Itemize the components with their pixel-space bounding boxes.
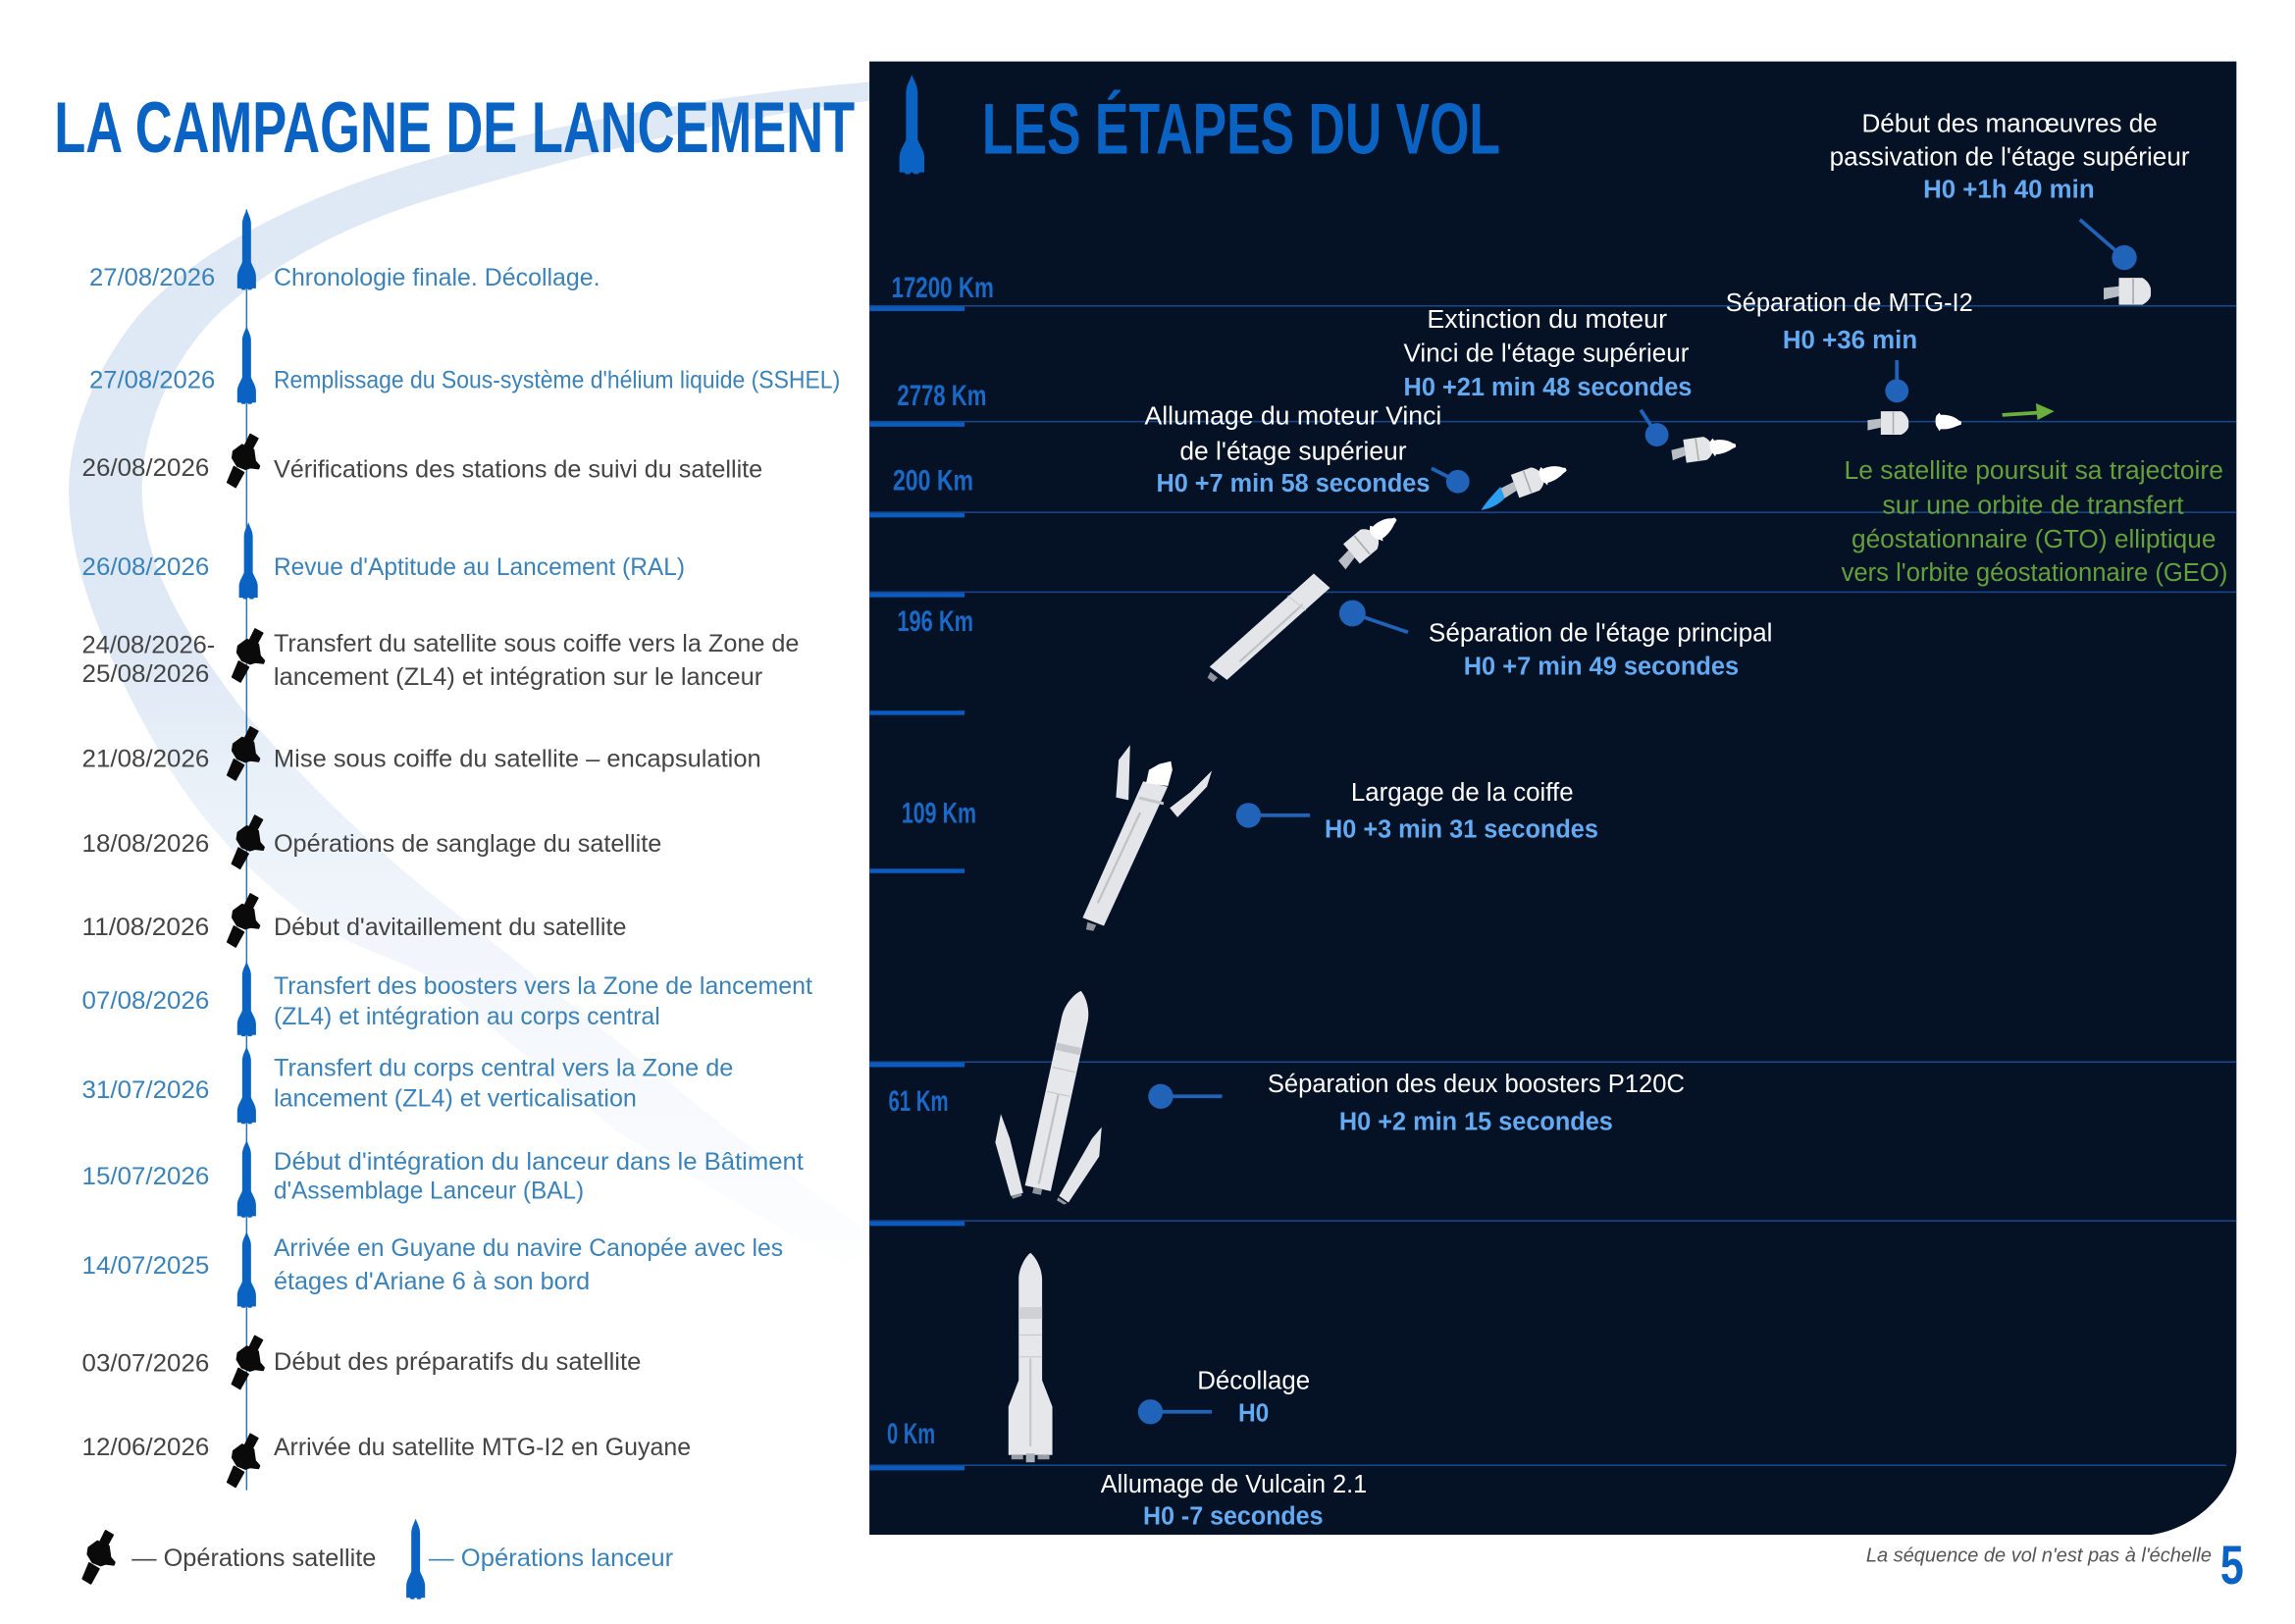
text: Début des manœuvres de — [1861, 108, 2158, 137]
line 2: sur une orbite de transfert — [1882, 491, 2184, 520]
altitude label: 200 km: 200 Km — [893, 465, 973, 498]
main stage — [1208, 573, 1330, 682]
text line 2: passivation de l'étage supérieur — [1830, 142, 2190, 172]
time: H0 +2 min 15 secondes — [1339, 1107, 1613, 1136]
step: allumage de Vulcain 2.1 — [1101, 1469, 1367, 1531]
description line 2: étages d'Ariane 6 à son bord — [274, 1268, 590, 1295]
legend label: lanceur: — Opérations lanceur — [429, 1545, 674, 1572]
text: Allumage de Vulcain 2.1 — [1101, 1469, 1367, 1498]
time: H0 +1h 40 min — [1923, 174, 2095, 203]
panel background — [869, 62, 2236, 1535]
icon: rocket — [237, 327, 256, 404]
note: échelle: La séquence de vol n'est pas à l'échelle — [1866, 1545, 2212, 1567]
step: séparation de MTG-I2 — [1726, 288, 2055, 435]
text: Largage de la coiffe — [1351, 777, 1574, 807]
time: H0 -7 secondes — [1143, 1501, 1324, 1531]
text: Décollage — [1197, 1366, 1310, 1395]
row: 14/07/2025 arrivée du navire — [82, 1231, 783, 1308]
icon: satellite — [228, 1434, 259, 1487]
row: 26/08/2026 revue d'aptitude — [82, 523, 685, 599]
step: début des manœuvres de passivation — [1830, 108, 2190, 305]
rocket on pad — [1009, 1253, 1053, 1462]
description: Revue d'Aptitude au Lancement (RAL) — [274, 553, 685, 581]
icon: satellite — [233, 629, 264, 682]
date: 21/08/2026 — [82, 746, 209, 773]
rocket core — [1023, 988, 1094, 1197]
description: Opérations de sanglage du satellite — [274, 830, 661, 858]
time: H0 — [1238, 1397, 1269, 1427]
text line 2: de l'étage supérieur — [1179, 436, 1407, 465]
row: 27/08/2026 remplissage — [89, 327, 840, 404]
description line 1: Transfert du satellite sous coiffe vers la Zone de — [274, 630, 799, 657]
upper stage with payload — [1670, 433, 1737, 465]
altitude label: 17200 km: 17200 Km — [891, 272, 994, 304]
satellite MTG-I2 — [1936, 413, 1961, 431]
description line 1: Transfert des boosters vers la Zone de lancement — [274, 972, 812, 1000]
date: 11/08/2026 — [82, 914, 209, 941]
description line 2: d'Assemblage Lanceur (BAL) — [274, 1178, 584, 1205]
row: 24-25/08/2026 transfert du satellite — [82, 629, 799, 691]
step: extinction du moteur Vinci — [1404, 304, 1737, 465]
time: H0 +7 min 58 secondes — [1156, 468, 1430, 498]
description: Vérifications des stations de suivi du satellite — [274, 455, 762, 483]
upper stage — [1867, 411, 1908, 435]
description: Chronologie finale. Décollage. — [274, 264, 600, 291]
date: 03/07/2026 — [82, 1350, 209, 1378]
date: 27/08/2026 — [89, 264, 215, 291]
date: 31/07/2026 — [82, 1076, 209, 1104]
altitude label: 2778 km: 2778 Km — [897, 380, 986, 412]
step: séparation des boosters — [995, 988, 1685, 1205]
description: Arrivée du satellite MTG-I2 en Guyane — [274, 1434, 691, 1461]
pin — [1138, 1399, 1212, 1424]
description line 1: Arrivée en Guyane du navire Canopée avec les — [274, 1234, 783, 1262]
row: 31/07/2026 transfert du corps central — [82, 1047, 733, 1124]
upper stage — [2104, 278, 2151, 305]
title: la campagne de lancement: LA CAMPAGNE DE LANCEMENT — [54, 88, 855, 168]
icon: rocket — [237, 1047, 256, 1124]
row: 27/08/2026 chronologie finale — [89, 209, 600, 291]
callout: orbite de transfert — [1842, 455, 2227, 587]
pin — [1885, 360, 1908, 402]
row: 18/08/2026 sanglage — [82, 815, 661, 868]
step: séparation de l'étage principal — [1208, 507, 1772, 682]
legend — [82, 1519, 674, 1599]
booster left — [995, 1114, 1023, 1199]
line 1: Le satellite poursuit sa trajectoire — [1845, 455, 2223, 485]
date: 26/08/2026 — [82, 553, 209, 581]
time: H0 +3 min 31 secondes — [1325, 813, 1598, 843]
date: 07/08/2026 — [82, 987, 209, 1015]
date: 18/08/2026 — [82, 830, 209, 858]
legend icon: satellite — [82, 1531, 115, 1584]
line 3: géostationnaire (GTO) elliptique — [1852, 524, 2216, 553]
description line 2: lancement (ZL4) et intégration sur le lanceur — [274, 663, 763, 691]
date end: 25/08/2026 — [82, 660, 209, 688]
rocket core with payload — [1082, 761, 1173, 931]
line 4: vers l'orbite géostationnaire (GEO) — [1842, 557, 2227, 587]
page number: 5 — [2220, 1535, 2244, 1596]
text line 2: Vinci de l'étage supérieur — [1404, 338, 1690, 367]
row: 12/06/2026 arrivée du satellite — [82, 1434, 691, 1487]
time: H0 +36 min — [1783, 325, 1917, 354]
text: Allumage du moteur Vinci — [1145, 401, 1441, 431]
upper stage with flame — [1474, 456, 1570, 511]
panel: les étapes du vol — [869, 62, 2236, 1535]
description: Début des préparatifs du satellite — [274, 1348, 641, 1376]
description line 1: Transfert du corps central vers la Zone de — [274, 1054, 733, 1081]
row: 11/08/2026 avitaillement — [82, 894, 626, 947]
icon: satellite — [228, 727, 259, 780]
description line 2: (ZL4) et intégration au corps central — [274, 1003, 660, 1030]
description: Mise sous coiffe du satellite – encapsulation — [274, 746, 761, 773]
icon: satellite — [232, 1336, 264, 1388]
pin — [1236, 803, 1310, 828]
fairing half right — [1170, 770, 1212, 817]
pin — [1641, 410, 1669, 446]
pin — [2080, 220, 2137, 270]
legend label: satellite: — Opérations satellite — [131, 1545, 376, 1572]
background swoosh arc — [69, 82, 878, 1266]
icon: rocket — [239, 523, 258, 599]
icon: satellite — [228, 435, 259, 488]
altitude label: 61 km: 61 Km — [888, 1085, 949, 1118]
fairing half left — [1116, 745, 1130, 800]
text: Séparation de l'étage principal — [1429, 617, 1772, 647]
icon: satellite — [232, 815, 264, 868]
altitude label: 196 km: 196 Km — [897, 605, 973, 638]
altitude lines — [869, 306, 2236, 1465]
date: 27/08/2026 — [89, 366, 215, 393]
date: 24/08/2026- — [82, 631, 215, 658]
row: 03/07/2026 préparatifs — [82, 1336, 641, 1388]
icon: rocket — [237, 1231, 256, 1308]
text: Séparation des deux boosters P120C — [1268, 1069, 1685, 1098]
timeline axis — [245, 209, 247, 1491]
row: 07/08/2026 transfert des boosters — [82, 962, 812, 1036]
icon: rocket — [237, 962, 256, 1036]
row: 21/08/2026 mise sous coiffe — [82, 727, 761, 780]
altitude label: 109 km: 109 Km — [902, 797, 976, 829]
altitude label: 0 km: 0 Km — [887, 1418, 935, 1450]
time: H0 +7 min 49 secondes — [1464, 652, 1739, 681]
pin — [1432, 468, 1470, 494]
description: Début d'avitaillement du satellite — [274, 914, 626, 941]
step: décollage — [1009, 1253, 1310, 1462]
icon: satellite — [228, 894, 259, 947]
arrow: orbit direction — [2003, 403, 2055, 420]
upper stage with payload — [1332, 507, 1403, 573]
pin — [1339, 601, 1408, 632]
icon: rocket — [237, 1140, 256, 1218]
row: 15/07/2026 début d'intégration — [82, 1140, 804, 1218]
step: allumage du moteur Vinci — [1145, 401, 1570, 511]
row: 26/08/2026 vérifications — [82, 435, 762, 488]
title: les étapes du vol: LES ÉTAPES DU VOL — [982, 90, 1500, 170]
legend icon: rocket — [406, 1519, 425, 1599]
icon: title rocket — [900, 75, 924, 174]
date: 14/07/2025 — [82, 1252, 209, 1280]
description line 1: Début d'intégration du lanceur dans le Bâtiment — [274, 1148, 804, 1176]
description: Remplissage du Sous-système d'hélium liquide (SSHEL) — [274, 366, 840, 393]
step: largage de la coiffe — [1082, 745, 1598, 931]
text: Extinction du moteur — [1427, 304, 1667, 334]
icon: rocket — [237, 209, 256, 289]
date: 12/06/2026 — [82, 1434, 209, 1461]
date: 26/08/2026 — [82, 454, 209, 482]
description line 2: lancement (ZL4) et verticalisation — [274, 1085, 637, 1113]
pin — [1148, 1084, 1223, 1109]
date: 15/07/2026 — [82, 1163, 209, 1190]
text: Séparation de MTG-I2 — [1726, 288, 1973, 317]
time: H0 +21 min 48 secondes — [1404, 372, 1692, 401]
booster right — [1057, 1127, 1102, 1205]
